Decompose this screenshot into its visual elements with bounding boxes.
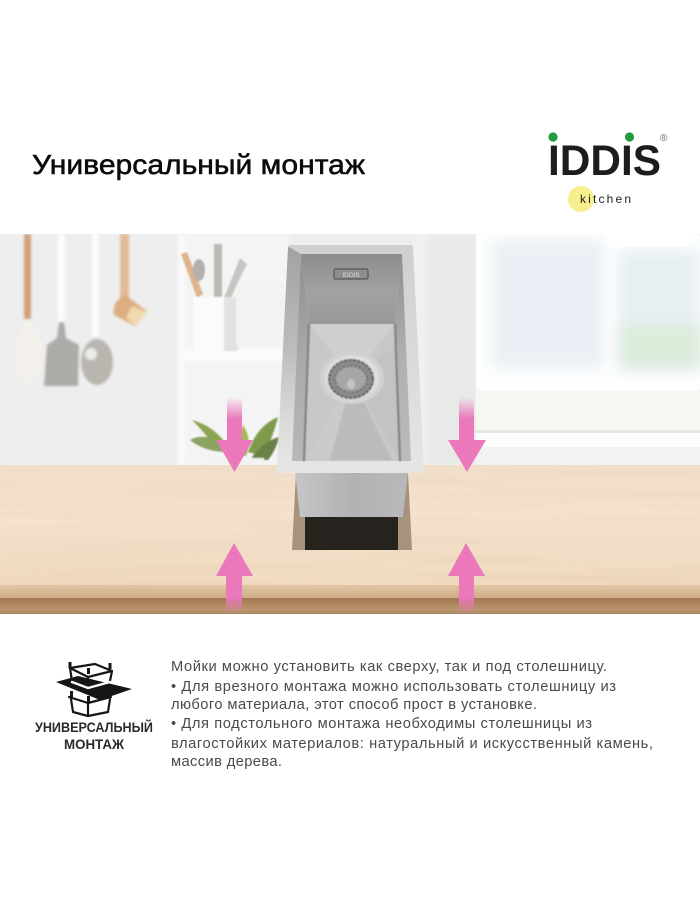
arrow: top right	[448, 397, 486, 472]
logo kitchen text: kitchen	[580, 192, 631, 206]
bowl crease lines	[304, 324, 400, 461]
icon label: МОНТАЖ	[64, 737, 125, 752]
cutout in countertop	[292, 473, 412, 550]
description text: влагостойких материалов: натуральный и искусственный камень,	[171, 736, 653, 752]
logo yellow circle	[568, 186, 594, 212]
bowl left wall	[292, 254, 309, 461]
title: Универсальный монтаж	[32, 149, 365, 180]
arrow: bottom right	[448, 543, 485, 613]
sink rim	[277, 245, 424, 473]
photo: kitchen background with countertop	[0, 234, 700, 614]
lower sink outline	[69, 697, 111, 716]
countertop front edge	[0, 585, 700, 598]
countertop lower edge	[0, 598, 700, 614]
description text: любого материала, этот способ прост в установке.	[171, 697, 537, 713]
sink logo plate	[334, 269, 368, 279]
drain	[320, 352, 384, 404]
countertop plate	[56, 676, 132, 700]
logo: IDDIS kitchen	[548, 132, 668, 212]
window	[476, 234, 700, 447]
icon label: УНИВЕРСАЛЬНЫЙ	[35, 720, 153, 735]
registered mark: ®	[660, 133, 668, 144]
dark opening	[305, 515, 398, 550]
arrow: top left	[216, 397, 253, 472]
icon label	[35, 720, 153, 752]
logo green dot right	[625, 132, 634, 142]
description text: • Для подстольного монтажа необходимы столешницы из	[171, 716, 592, 732]
sink body below rim	[295, 470, 408, 517]
sink logo plate: IDDIS	[342, 272, 360, 279]
description text: • Для врезного монтажа можно использовать столешницу из	[171, 679, 616, 695]
icon: universal mounting	[56, 662, 132, 716]
hanging utensils	[15, 234, 147, 386]
bowl floor	[304, 324, 400, 461]
bowl right wall	[395, 254, 411, 461]
countertop surface	[0, 465, 700, 585]
logo green dot left	[548, 132, 558, 142]
plate opening highlight	[72, 682, 110, 688]
background wall	[0, 234, 700, 466]
countertop grain	[0, 465, 700, 614]
arrow: bottom left	[216, 543, 253, 613]
shelving unit	[178, 234, 290, 466]
sink bowl	[292, 254, 411, 461]
cutlery in white cup	[180, 243, 248, 352]
description text: массив дерева.	[171, 754, 282, 770]
sink rim shaded left side	[277, 247, 301, 468]
logo wordmark: IDDIS	[548, 137, 661, 185]
blurred plant	[190, 417, 279, 466]
bowl back wall	[301, 254, 402, 324]
description text	[171, 659, 653, 770]
upper sink outline	[70, 664, 112, 688]
description text: Мойки можно установить как сверху, так и под столешницу.	[171, 659, 607, 675]
mounting clips	[68, 662, 112, 702]
floor facets	[331, 403, 391, 460]
